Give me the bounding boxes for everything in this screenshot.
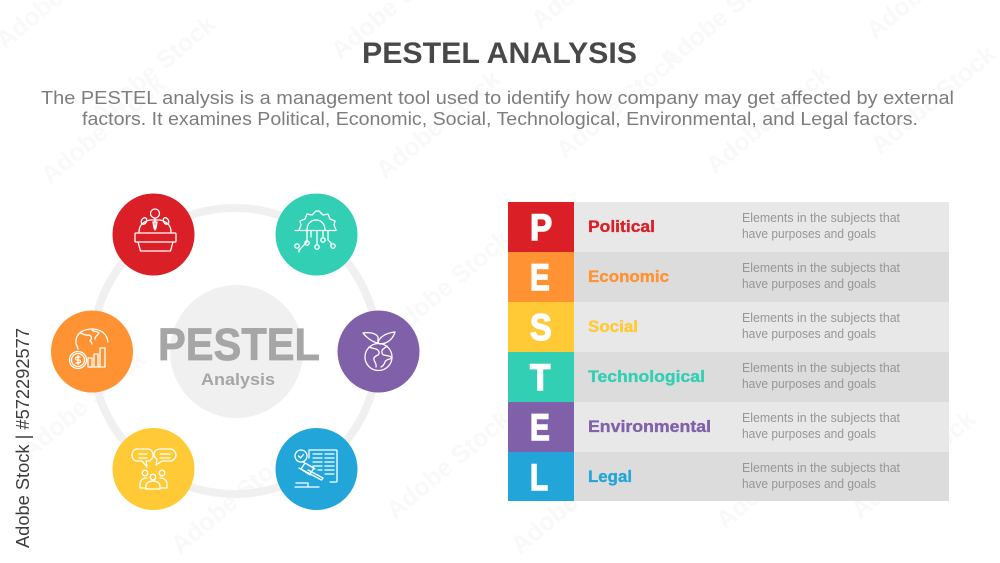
row: environmental: E <box>530 408 550 449</box>
text: Adobe Stock <box>711 415 846 535</box>
row: economic <box>508 252 901 302</box>
cycle diagram <box>51 194 420 510</box>
row: social: S <box>530 307 552 348</box>
intro text: The PESTEL analysis is a management tool used to identify how company may get affected by external <box>41 87 954 108</box>
row: technological: have purposes and goals <box>742 377 876 391</box>
text: Adobe Stock <box>166 440 301 560</box>
row: economic: E <box>530 258 550 299</box>
text: Adobe Stock <box>36 70 171 190</box>
row: technological: T <box>530 357 551 398</box>
stock credit: Adobe Stock | #572292577 <box>13 328 33 548</box>
ring <box>92 208 378 494</box>
intro text: factors. It examines Political, Economic, Social, Technological, Environmental, and Legal factors. <box>82 108 918 129</box>
center label: PESTEL <box>158 319 320 370</box>
row: legal: Elements in the subjects that <box>742 461 901 475</box>
row: technological <box>508 352 901 402</box>
row: political: Political <box>588 217 655 236</box>
row: legal: have purposes and goals <box>742 477 876 491</box>
row: social: Elements in the subjects that <box>742 311 901 325</box>
row: environmental <box>508 402 901 452</box>
row: political <box>508 202 901 252</box>
row: technological: Elements in the subjects that <box>742 361 901 375</box>
row: economic: Economic <box>588 267 669 286</box>
icon: legal gavel and document <box>276 428 358 510</box>
center label: Analysis <box>201 371 275 389</box>
icon: environmental earth with leaves <box>338 310 420 392</box>
text: Adobe Stock <box>551 45 686 165</box>
text: Adobe Stock <box>381 225 516 345</box>
row: legal: Legal <box>588 467 632 486</box>
row: political: P <box>530 207 552 248</box>
text: Adobe Stock <box>866 40 1000 160</box>
text: Adobe Stock <box>381 405 516 525</box>
text: Adobe Stock <box>371 65 506 185</box>
row: environmental: have purposes and goals <box>742 427 876 441</box>
text: Adobe Stock <box>701 60 836 180</box>
PESTEL table <box>508 202 949 501</box>
row: technological: Technological <box>588 367 705 386</box>
icon: technological gear circuit <box>276 194 358 276</box>
row: social: have purposes and goals <box>742 327 876 341</box>
icon: social people and speech bubbles <box>112 428 194 510</box>
row: economic: Elements in the subjects that <box>742 261 901 275</box>
row: environmental: Environmental <box>588 417 711 436</box>
row: legal: L <box>530 458 548 499</box>
icon: political podium <box>112 194 194 276</box>
row: social <box>508 302 901 352</box>
text: Adobe Stock <box>506 440 641 560</box>
row: political: have purposes and goals <box>742 227 876 241</box>
row: environmental: Elements in the subjects that <box>742 411 901 425</box>
row: legal <box>508 452 901 501</box>
text: Adobe Stock <box>846 405 981 525</box>
row backgrounds <box>574 202 949 501</box>
row: economic: have purposes and goals <box>742 277 876 291</box>
intro text <box>41 87 954 129</box>
text: Adobe Stock <box>16 345 151 465</box>
text: Adobe Stock <box>86 10 221 130</box>
row: social: Social <box>588 317 638 336</box>
icon: economic globe and chart <box>51 310 133 392</box>
title: PESTEL ANALYSIS <box>362 37 637 70</box>
row: political: Elements in the subjects that <box>742 211 901 225</box>
center label <box>158 285 320 418</box>
